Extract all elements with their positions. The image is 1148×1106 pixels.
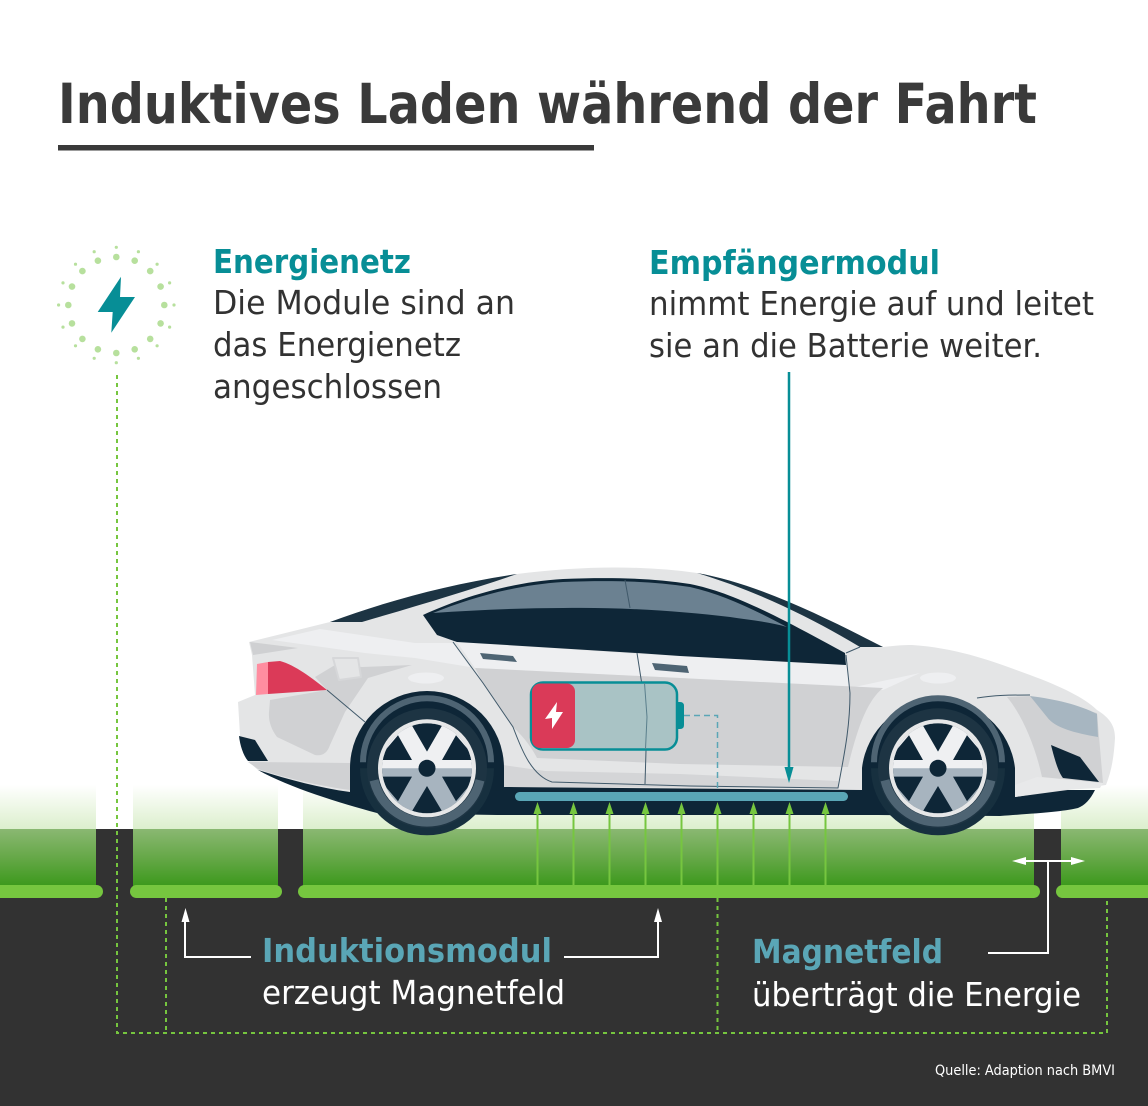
front shading xyxy=(1007,696,1103,783)
arrow: magnetic field gap xyxy=(988,857,1085,953)
induction modules xyxy=(0,885,1148,898)
rear vent xyxy=(239,736,268,761)
text block: Energienetz: Energienetz xyxy=(213,242,411,281)
car underbody xyxy=(258,770,1095,816)
text block: Magnetfeld: Magnetfeld xyxy=(752,932,943,971)
front fender xyxy=(920,672,956,684)
car xyxy=(238,567,1115,835)
door panel xyxy=(475,668,883,767)
battery connection dashed line xyxy=(684,716,718,792)
roof strip xyxy=(330,573,883,647)
front wheel xyxy=(871,698,1005,835)
door sill xyxy=(503,765,838,788)
title underline xyxy=(58,145,594,150)
rear highlight xyxy=(272,629,470,667)
text block: Magnetfeld: überträgt die Energie xyxy=(752,975,1081,1014)
door highlight xyxy=(457,642,920,690)
receiver module xyxy=(515,792,848,801)
arrow: receiver callout xyxy=(784,372,794,783)
text block: Empfängermodul: Empfängermodul xyxy=(649,243,940,282)
green dotted power lines xyxy=(117,375,1107,1033)
arrow: induction module right xyxy=(564,908,662,957)
text block: Energienetz: Die Module sind an xyxy=(213,283,515,322)
text block: Induktionsmodul: Induktionsmodul xyxy=(262,931,552,970)
rear shading xyxy=(269,665,412,755)
seam over battery xyxy=(644,683,647,749)
side window glass xyxy=(433,581,787,627)
front vent xyxy=(1051,745,1099,782)
rear wheel xyxy=(360,698,494,835)
rear bumper band xyxy=(248,762,350,790)
text block: Energienetz xyxy=(213,242,515,406)
battery xyxy=(531,682,684,750)
door handles xyxy=(480,653,689,673)
source note: Quelle: Adaption nach BMVI xyxy=(935,1063,1115,1079)
road surface xyxy=(0,785,1148,1106)
car body xyxy=(238,567,1115,797)
icon: energy grid bolt with dots xyxy=(57,246,176,364)
text block: Induktionsmodul: erzeugt Magnetfeld xyxy=(262,973,565,1012)
front lip xyxy=(1015,777,1103,797)
text block: Energienetz: angeschlossen xyxy=(213,367,442,406)
text block: Empfängermodul xyxy=(649,243,1094,365)
text block: Empfängermodul: nimmt Energie auf und leitet xyxy=(649,284,1094,323)
text block: Induktionsmodul xyxy=(262,931,565,1012)
door seams xyxy=(327,580,1030,788)
headlight xyxy=(1030,696,1098,737)
text block: Energienetz: das Energienetz xyxy=(213,325,461,364)
wheel arches xyxy=(350,691,1015,797)
side windows frame xyxy=(423,578,846,665)
spoiler shade xyxy=(250,642,298,655)
text block: Empfängermodul: sie an die Batterie weiter. xyxy=(649,326,1042,365)
tail light xyxy=(256,661,327,695)
arrow: induction module left xyxy=(182,908,251,957)
magnetic field arrows xyxy=(534,802,830,885)
text block: Magnetfeld xyxy=(752,932,1081,1014)
fuel cap xyxy=(333,658,361,680)
